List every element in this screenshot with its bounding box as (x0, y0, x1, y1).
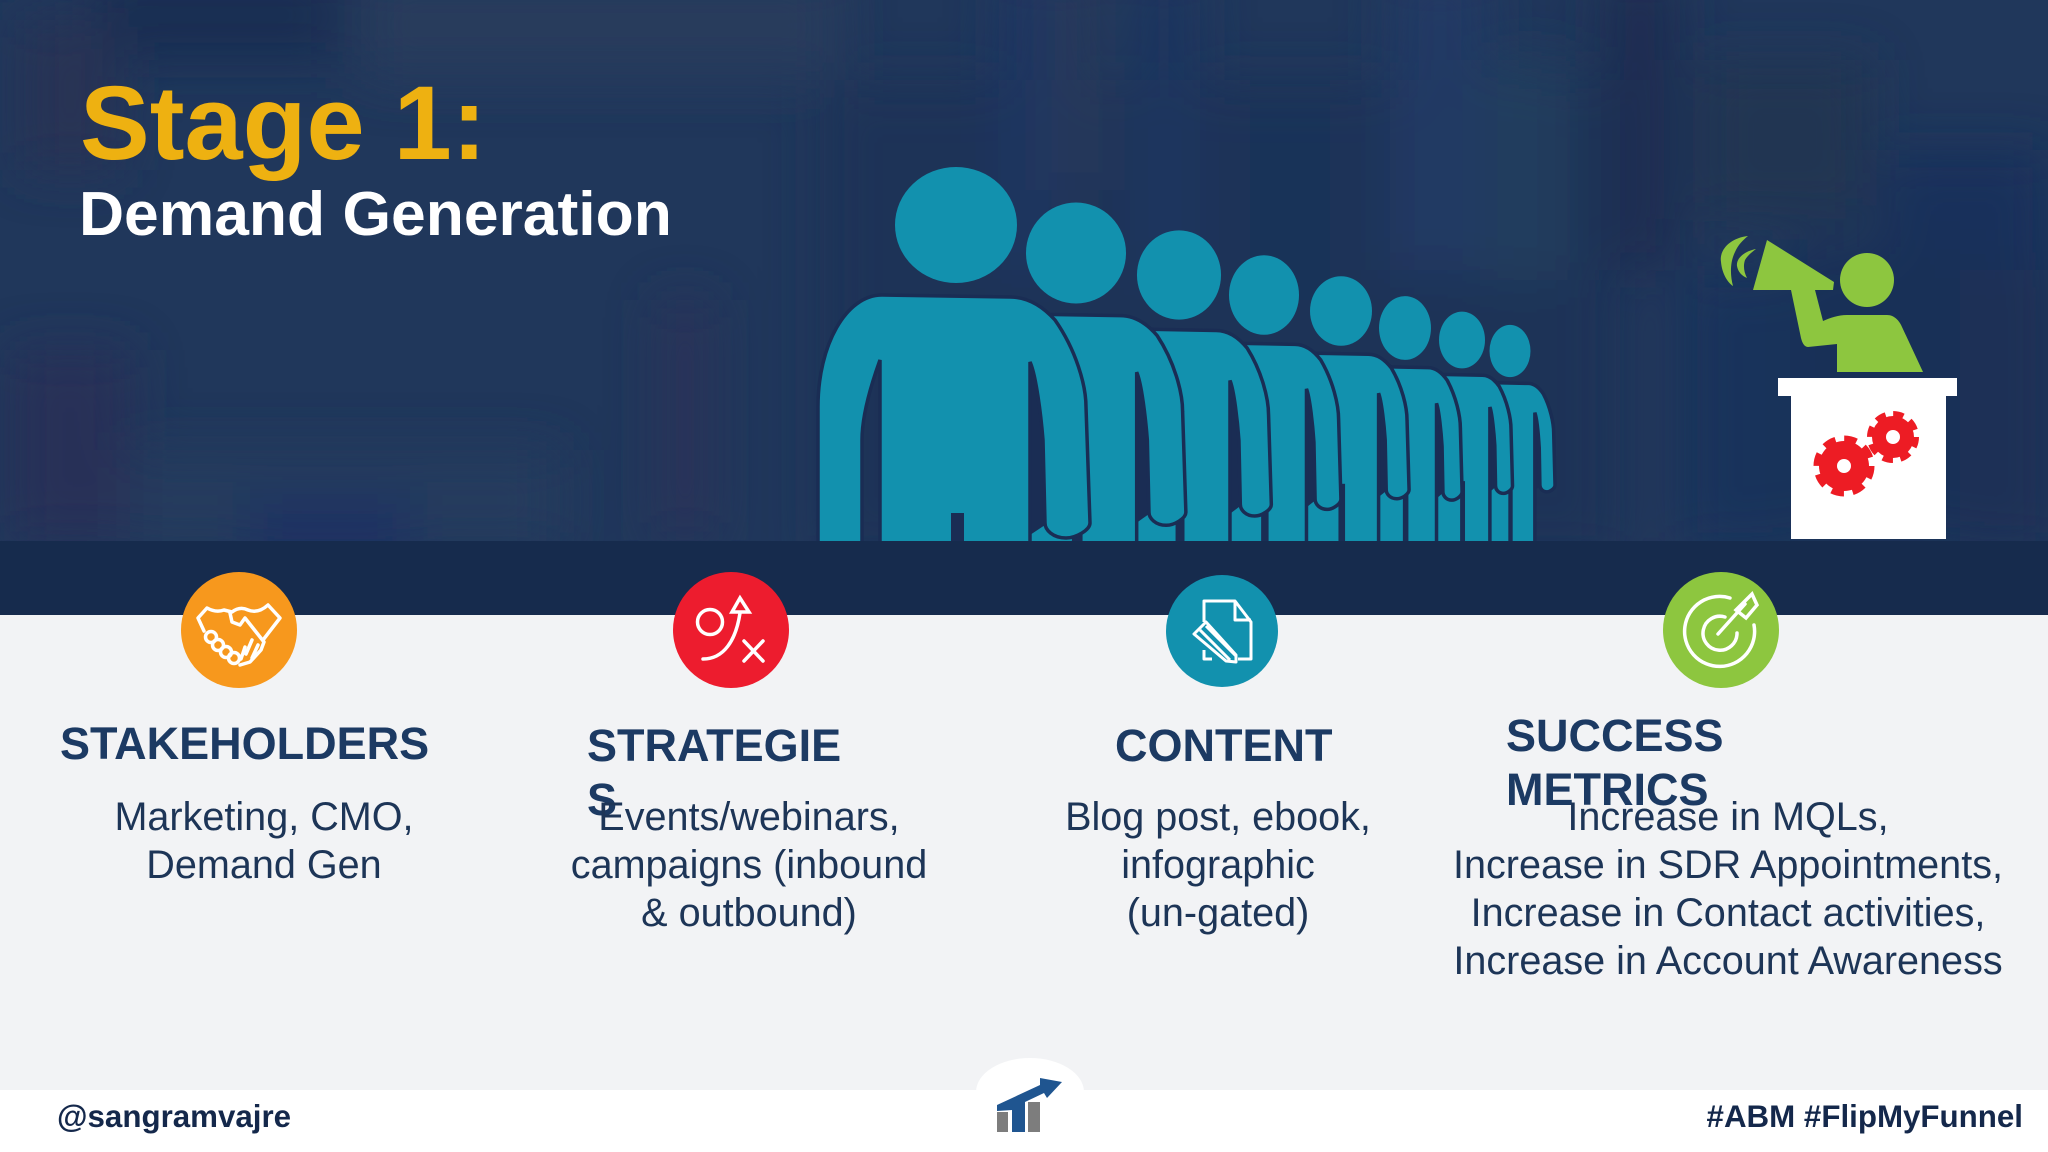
sound waves (1721, 236, 1756, 286)
hashtags: #ABM #FlipMyFunnel (1707, 1099, 2023, 1134)
heading: success metrics: METRICS (1506, 764, 1708, 815)
column: success metrics (1453, 572, 2003, 983)
podium (1778, 378, 1957, 539)
speaker figure (1753, 240, 1923, 372)
text: success metrics body (1453, 795, 2003, 983)
logo: growth arrow and bars (976, 1058, 1084, 1132)
panel: hero banner (0, 0, 2048, 615)
panel: content background (0, 615, 2048, 1090)
text: content body (1065, 795, 1371, 935)
subtitle: Demand Generation: Demand Generation (79, 180, 672, 249)
text: strategies body: Events/webinars, (598, 795, 900, 839)
text: success metrics body: Increase in SDR Appointments, (1453, 843, 2003, 887)
icon: handshake (181, 572, 297, 688)
text: content body: Blog post, ebook, (1065, 795, 1371, 839)
heading: success metrics (1506, 710, 1724, 815)
heading: stakeholders: STAKEHOLDERS (60, 718, 429, 769)
icon: strategy play (673, 572, 789, 688)
column: stakeholders (60, 572, 429, 887)
heading: strategies (587, 720, 841, 825)
text: strategies body: campaigns (inbound (571, 843, 927, 887)
icon: document and pencil (1166, 575, 1278, 687)
column: content (1065, 575, 1371, 935)
text: strategies body (571, 795, 927, 935)
heading: success metrics: SUCCESS (1506, 710, 1724, 761)
text: content body: (un-gated) (1127, 891, 1309, 935)
illustration: speaker with megaphone at podium (1721, 236, 1957, 539)
heading: strategies: S (587, 774, 617, 825)
footer bar (0, 1058, 2048, 1152)
text: content body: infographic (1121, 843, 1315, 887)
handle: @sangramvajre (57, 1099, 291, 1134)
text: strategies body: & outbound) (641, 891, 857, 935)
text: success metrics body: Increase in Account Awareness (1453, 939, 2003, 983)
column: strategies (571, 572, 927, 935)
text: stakeholders body: Marketing, CMO, (114, 795, 414, 839)
illustration: queue of people (816, 167, 1554, 541)
hero background (0, 0, 2048, 615)
text: success metrics body: Increase in Contact activities, (1471, 891, 1985, 935)
heading: content: CONTENT (1115, 720, 1332, 771)
gears (1818, 415, 1915, 492)
heading: strategies: STRATEGIE (587, 720, 841, 771)
text: stakeholders body (114, 795, 414, 887)
text: success metrics body: Increase in MQLs, (1567, 795, 1889, 839)
icon: target with arrow (1663, 572, 1779, 688)
text: stakeholders body: Demand Gen (146, 843, 382, 887)
title: Stage 1: Stage 1: (80, 65, 487, 182)
